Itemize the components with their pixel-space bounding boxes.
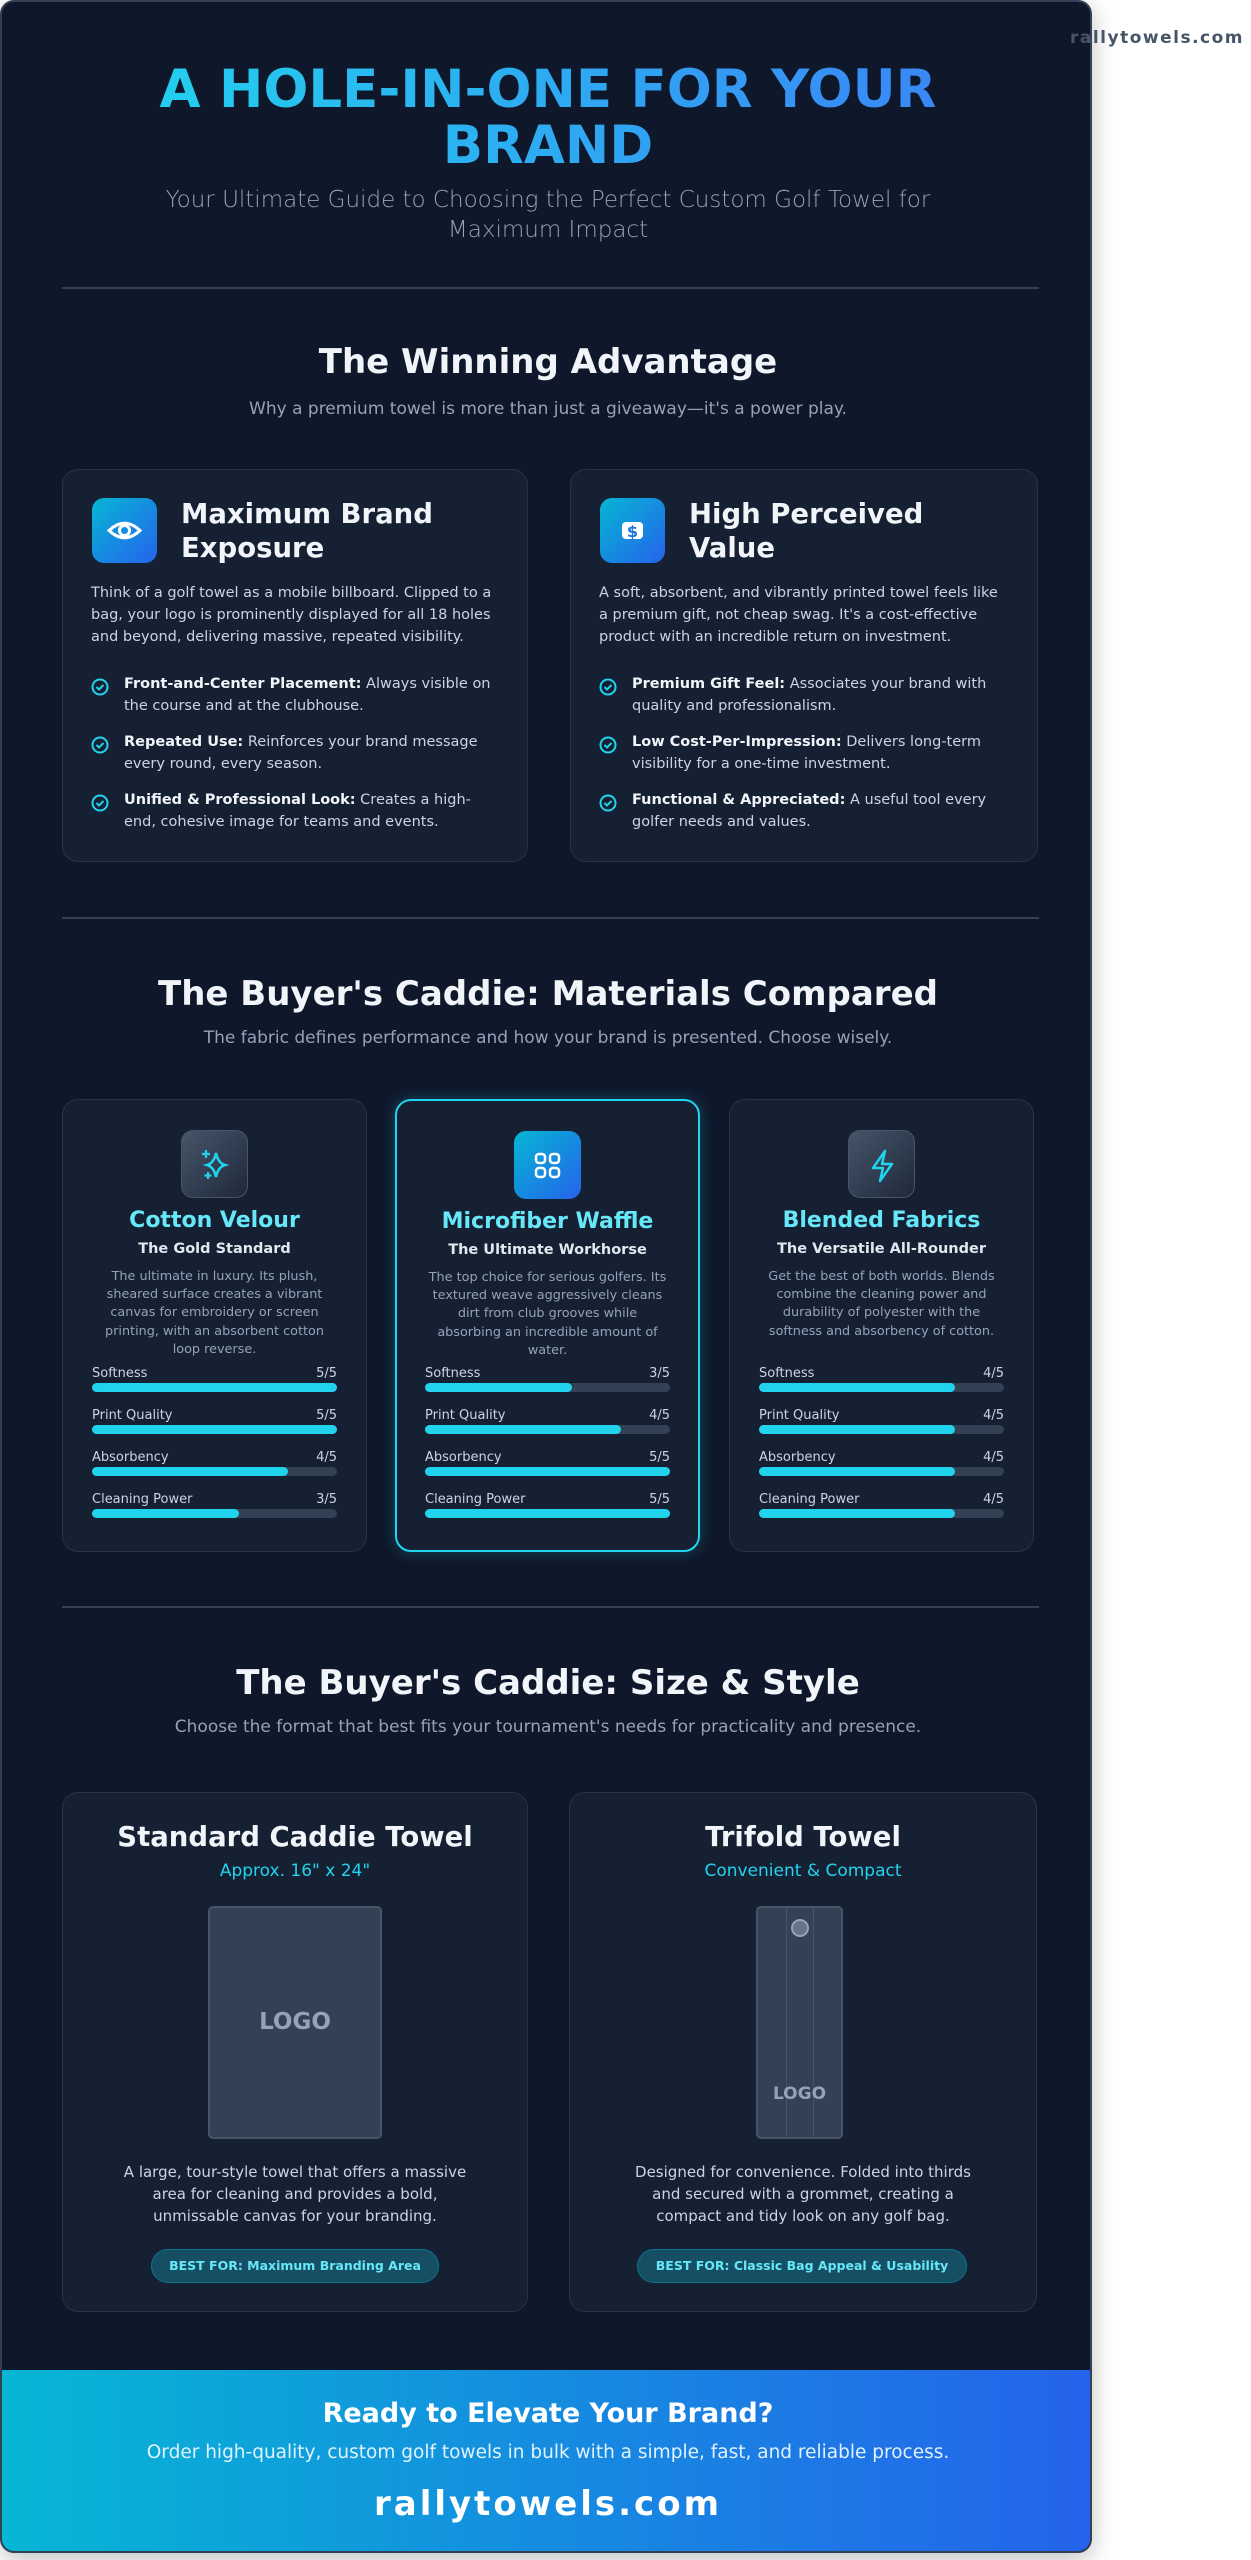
panel: microfiber waffle (highlighted): The Ultimate Workhorse [448,1242,647,1258]
panel: microfiber waffle (highlighted) [395,1099,700,1552]
panel: maximum brand exposure [62,469,528,862]
rating bars: Softness [92,1366,147,1381]
badge [637,2249,967,2283]
rating bars: 4/5 [983,1408,1004,1423]
rating bars: Cleaning Power [759,1492,859,1507]
rating bars: 5/5 [316,1408,337,1423]
name: Blended Fabrics [783,1208,980,1233]
subheading: Why a premium towel is more than just a giveaway—it's a power play. [249,399,847,419]
card title: High Perceived [689,498,923,530]
rating bars: 3/5 [649,1366,670,1381]
heading: materials: The Buyer's Caddie: Materials Compared [158,974,938,1014]
rating bars: Absorbency [759,1450,836,1465]
bullet: Low Cost-Per-Impression: Delivers long-term visibility for a one-time investment. [632,734,981,772]
icon: money: $ [627,522,638,541]
rating bars: Absorbency [425,1450,502,1465]
panel: blended fabrics [729,1099,1034,1552]
text: A soft, absorbent, and vibrantly printed towel feels like a premium gift, not cheap swag. It's a cost-effective product with an incredible return on investment. [599,585,998,645]
rating bars: Print Quality [92,1408,172,1423]
panel: standard caddie towel [62,1792,528,2312]
bullet: Repeated Use: Reinforces your brand message every round, every season. [124,734,478,772]
badge [151,2249,439,2283]
panel: blended fabrics: The Versatile All-Rounder [777,1241,986,1257]
rating bars: 4/5 [649,1408,670,1423]
bullet: Unified & Professional Look: Creates a high-end, cohesive image for teams and events. [124,792,471,830]
subtitle: Your Ultimate Guide to Choosing the Perfect Custom Golf Towel for Maximum Impact [166,187,930,243]
rating bars: Cleaning Power [425,1492,525,1507]
rating bars [425,1366,670,1518]
rating bars: 4/5 [983,1366,1004,1381]
trifold illustration [756,1906,843,2139]
description: Designed for convenience. Folded into thirds and secured with a grommet, creating a compact and tidy look on any golf bag. [635,2163,971,2225]
text: Think of a golf towel as a mobile billboard. Clipped to a bag, your logo is prominently displayed for all 18 holes and beyond, delivering massive, repeated visibility. [91,585,491,645]
bullet: Front-and-Center Placement: Always visible on the course and at the clubhouse. [124,676,491,714]
icon: sparkles [181,1130,248,1198]
icon: eye [92,498,157,563]
heading: size & style: The Buyer's Caddie: Size & Style [236,1663,860,1703]
rating bars: Softness [425,1366,480,1381]
icon: money [600,498,665,563]
rating bars: 4/5 [983,1492,1004,1507]
rating bars [92,1366,337,1518]
panel: cotton velour: The Gold Standard [138,1241,291,1257]
panel: trifold towel: Convenient & Compact [704,1861,902,1881]
name: Microfiber Waffle [442,1209,653,1234]
card title [689,498,923,564]
cta url: rallytowels.com [374,2484,722,2524]
badge: BEST FOR: Classic Bag Appeal & Usability [656,2258,948,2273]
rating bars: 3/5 [316,1492,337,1507]
panel: trifold towel: Trifold Towel [705,1821,901,1853]
rating bars: 5/5 [649,1492,670,1507]
rating bars: 5/5 [316,1366,337,1381]
rating bars: 5/5 [649,1450,670,1465]
bullet: Premium Gift Feel: Associates your brand with quality and professionalism. [632,676,986,714]
title: A HOLE-IN-ONE FOR YOUR BRAND [160,59,936,176]
description: Get the best of both worlds. Blends combine the cleaning power and durability of polyester with the softness and absorbency of cotton. [768,1269,995,1339]
panel: standard caddie towel: Standard Caddie Towel [117,1821,473,1853]
panel: standard caddie towel: Approx. 16" x 24" [220,1861,370,1881]
panel: cotton velour [62,1099,367,1552]
rating bars: 4/5 [316,1450,337,1465]
trifold illustration: LOGO [773,2084,826,2104]
name: Cotton Velour [129,1208,300,1233]
card title [181,498,433,564]
icon: grid [514,1131,581,1199]
badge: BEST FOR: Maximum Branding Area [169,2258,421,2273]
towel illustration [208,1906,382,2139]
rating bars: Print Quality [425,1408,506,1423]
towel illustration: LOGO [259,2009,331,2035]
description: The ultimate in luxury. Its plush, sheared surface creates a vibrant canvas for embroidery or screen printing, with an absorbent cotton loop reverse. [105,1269,324,1357]
subheading: The fabric defines performance and how your brand is presented. Choose wisely. [204,1028,892,1048]
card title: Exposure [181,532,324,564]
heading: winning advantage: The Winning Advantage [319,342,777,382]
rating bars: Cleaning Power [92,1492,192,1507]
subheading: Choose the format that best fits your tournament's needs for practicality and presence. [175,1717,921,1737]
rating bars: 4/5 [983,1450,1004,1465]
panel: trifold towel [569,1792,1037,2312]
icon: lightning [848,1130,915,1198]
rating bars: Absorbency [92,1450,169,1465]
panel: high perceived value [570,469,1038,862]
site url top right: rallytowels.com [1070,28,1244,48]
footer call to action [2,2370,1094,2560]
cta heading: Ready to Elevate Your Brand? [323,2398,773,2429]
description: A large, tour-style towel that offers a massive area for cleaning and provides a bold, unmissable canvas for your branding. [124,2163,466,2225]
card title: Maximum Brand [181,498,433,530]
card title: Value [689,532,775,564]
cta text: Order high-quality, custom golf towels in bulk with a simple, fast, and reliable process. [147,2442,949,2463]
rating bars: Softness [759,1366,814,1381]
rating bars: Print Quality [759,1408,840,1423]
rating bars [759,1366,1004,1518]
bullet: Functional & Appreciated: A useful tool every golfer needs and values. [632,792,986,830]
description: The top choice for serious golfers. Its textured weave aggressively cleans dirt from club grooves while absorbing an incredible amount of water. [429,1270,666,1358]
